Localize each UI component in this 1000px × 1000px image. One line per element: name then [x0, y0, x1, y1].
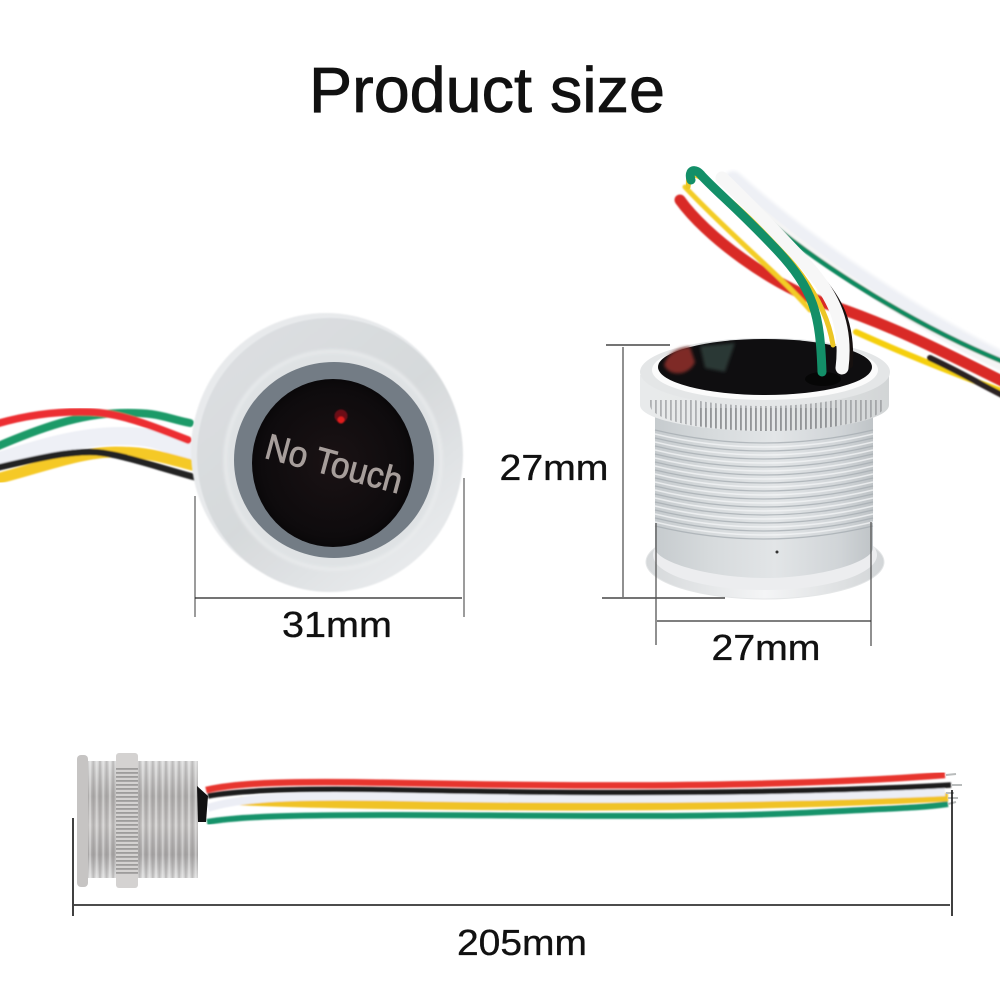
wires: straight cable [206, 775, 951, 822]
wire tips [946, 774, 962, 804]
sensor: front flange [77, 755, 88, 887]
dimension: 27mm width: 27mm [712, 627, 820, 668]
sensor: gray LED ring [234, 362, 434, 558]
sensor: black touch face [252, 379, 414, 547]
sensor: threaded body [88, 761, 198, 878]
dimension: 205mm [73, 790, 952, 963]
sensor: knurled collar [640, 338, 890, 431]
sensor: black rear face [658, 339, 872, 395]
dimension: 27mm height: 27mm [500, 447, 608, 488]
sensor: screw mark [776, 550, 778, 554]
wires: front bundle entering sensor [688, 171, 850, 372]
dimension: 31mm [195, 478, 464, 645]
sensor: threaded barrel [655, 410, 873, 578]
sensor: knurled nut [116, 753, 138, 888]
product: full length view with cable [77, 753, 962, 888]
dimension: 205mm: 205mm [457, 922, 587, 963]
sensor: sealing blob [197, 786, 208, 822]
sensor body: outer aluminium ring [191, 313, 463, 592]
wires: left bundle [0, 412, 194, 479]
sensor label: No Touch: No Touch [261, 426, 407, 501]
product: front view of sensor [0, 313, 463, 592]
icon: red indicator LED [334, 410, 348, 424]
dimension: 27mm width [656, 522, 871, 668]
product: side view of sensor [640, 171, 1000, 599]
dimension: 27mm height [500, 345, 725, 598]
wires: rear bundle [680, 180, 1000, 396]
sensor: base flange [646, 520, 884, 599]
dimension: 31mm: 31mm [282, 604, 392, 645]
title: Product size [309, 54, 665, 126]
